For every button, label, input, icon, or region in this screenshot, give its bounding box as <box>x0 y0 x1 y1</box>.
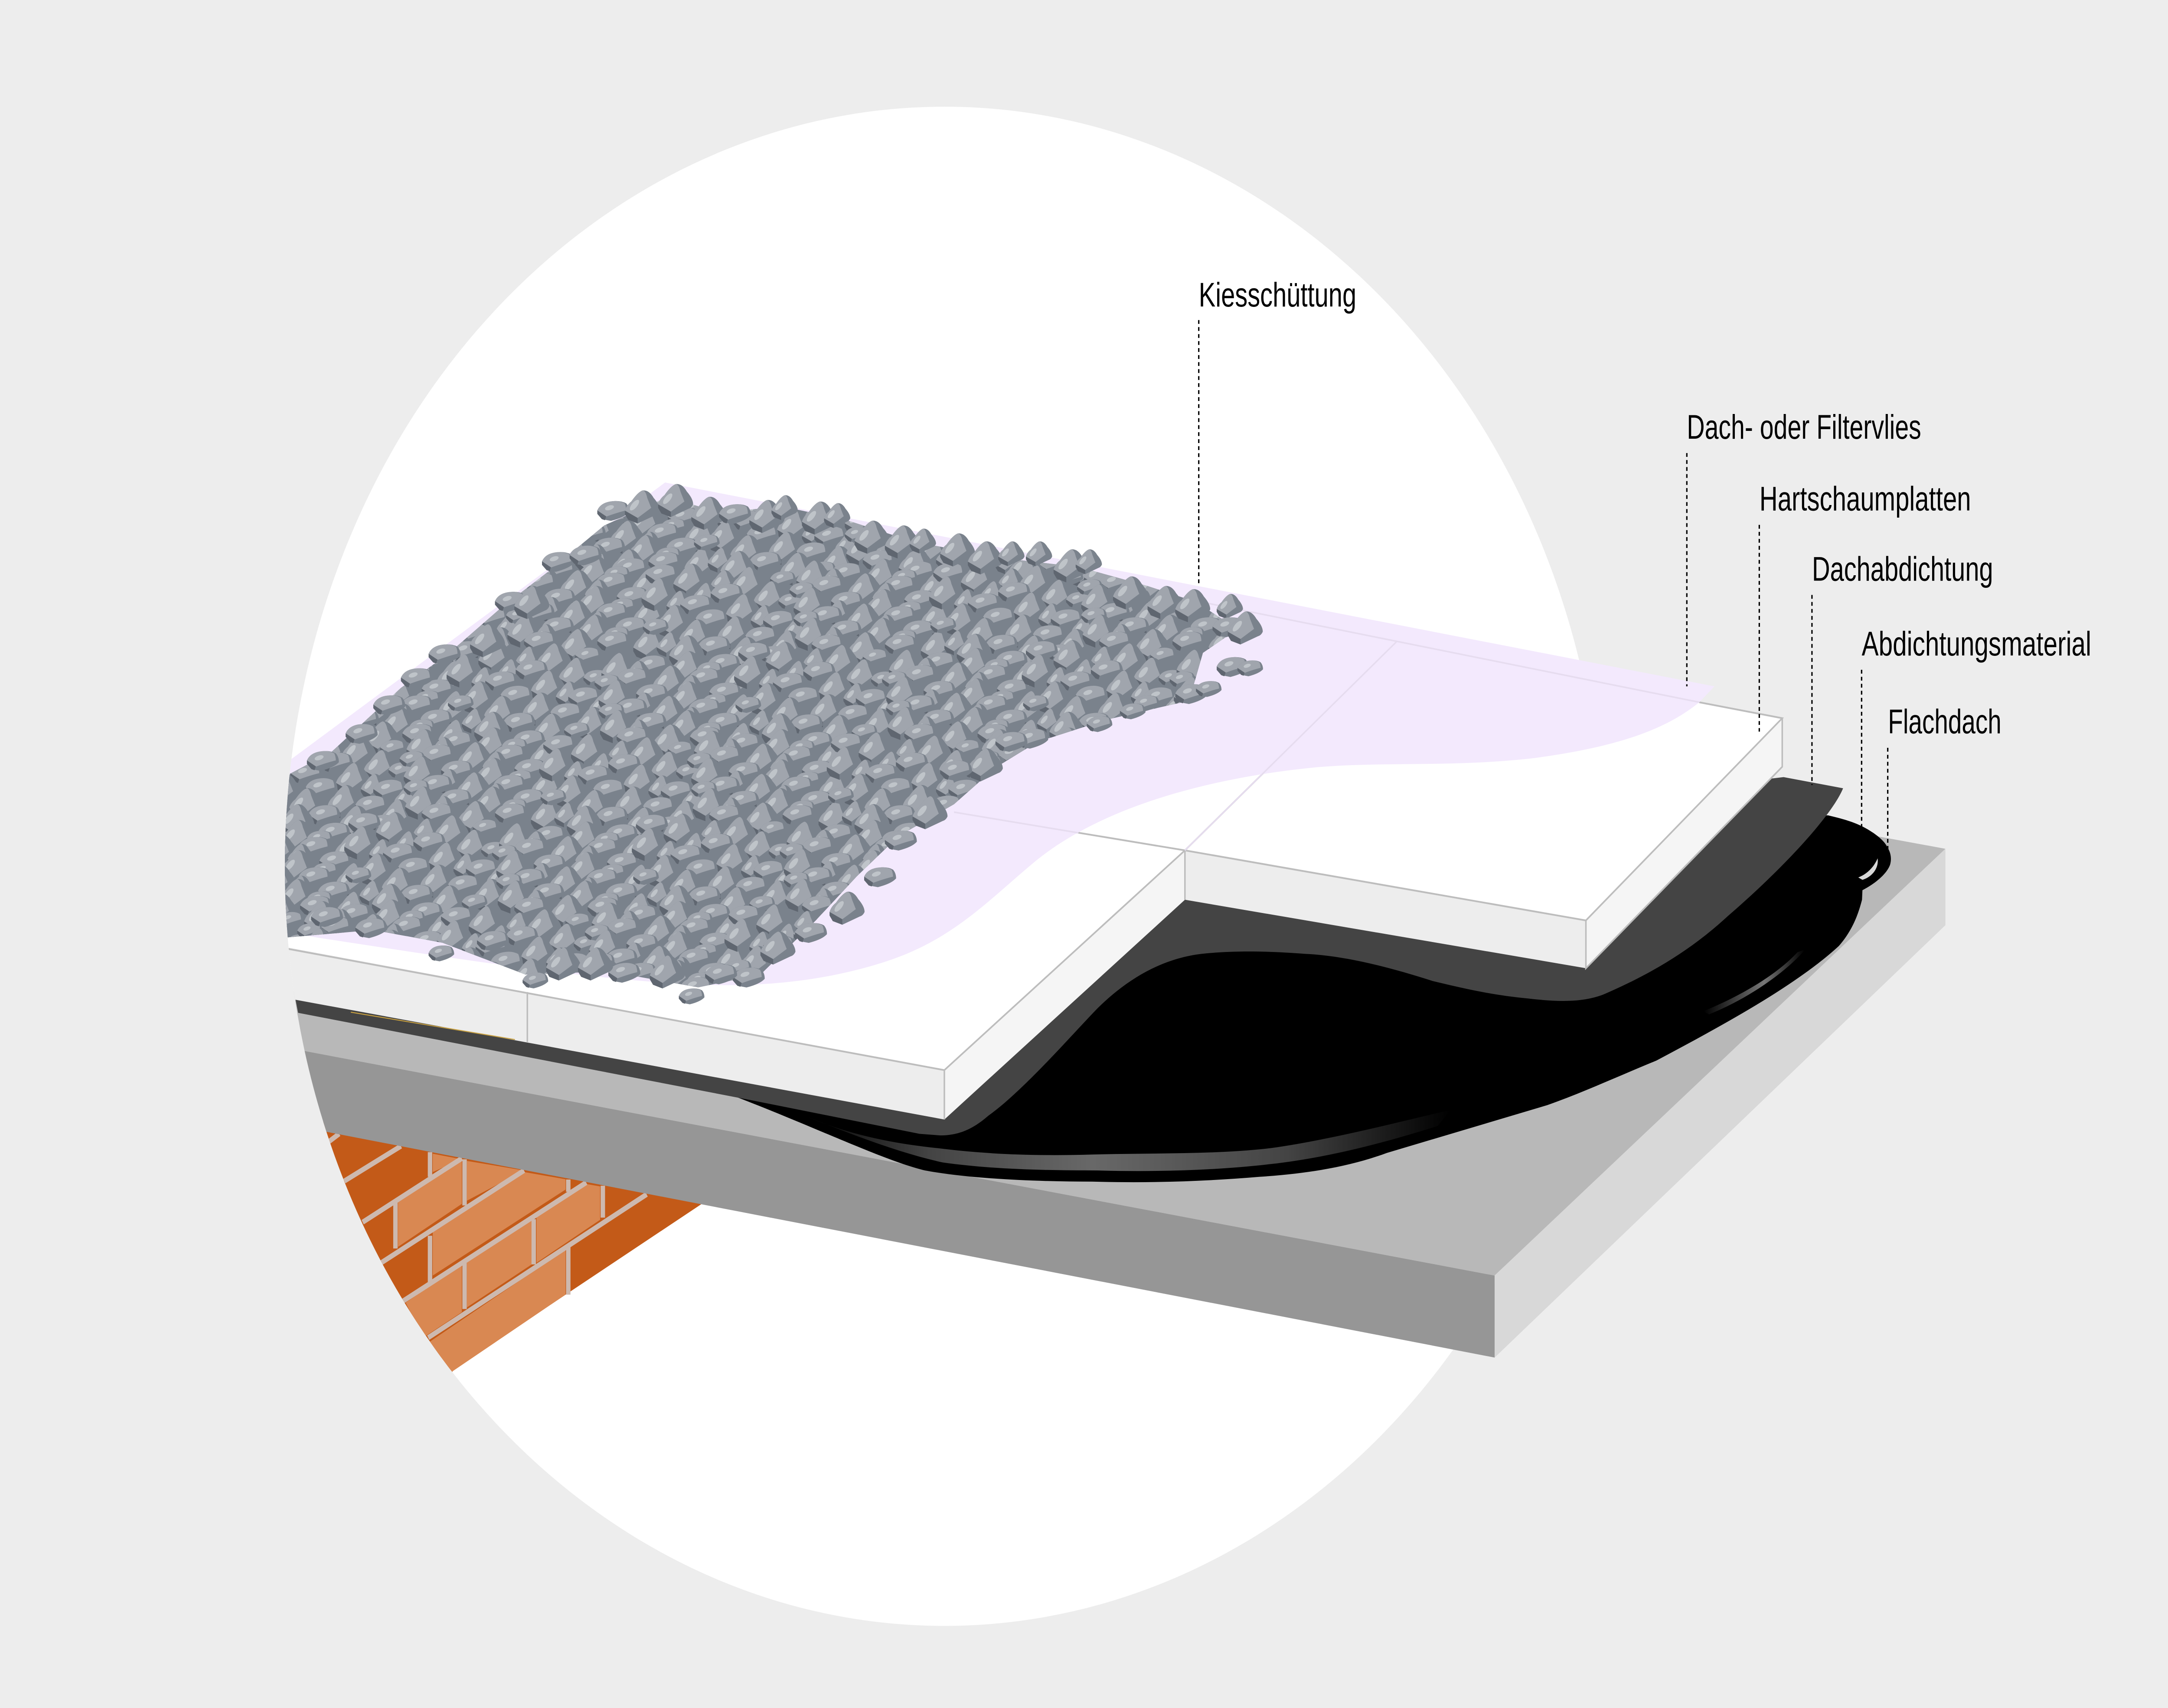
roof waterproofing dark layer <box>295 777 1843 1135</box>
fleece seams <box>885 538 1699 851</box>
rigid foam panels <box>289 701 1784 1119</box>
label: Dachabdichtung: Dachabdichtung <box>1812 550 1993 588</box>
label: Kiesschüttung: Kiesschüttung <box>1199 276 1356 314</box>
gravel edge stones <box>307 484 1263 1004</box>
brick wall <box>323 1122 702 1372</box>
label: Flachdach: Flachdach <box>1888 702 2001 741</box>
label: Hartschaumplatten: Hartschaumplatten <box>1760 479 1971 518</box>
roof or filter fleece <box>263 482 1714 985</box>
label: Abdichtungsmaterial: Abdichtungsmaterial <box>1862 624 2091 663</box>
concrete flat roof slab <box>263 796 1946 1358</box>
label: Dach- oder Filtervlies: Dach- oder Filtervlies <box>1687 407 1921 446</box>
roof illustration <box>284 482 1945 1372</box>
gravel fill <box>149 474 1385 1019</box>
white circle <box>285 107 1604 1626</box>
sealing material black <box>737 815 1891 1182</box>
